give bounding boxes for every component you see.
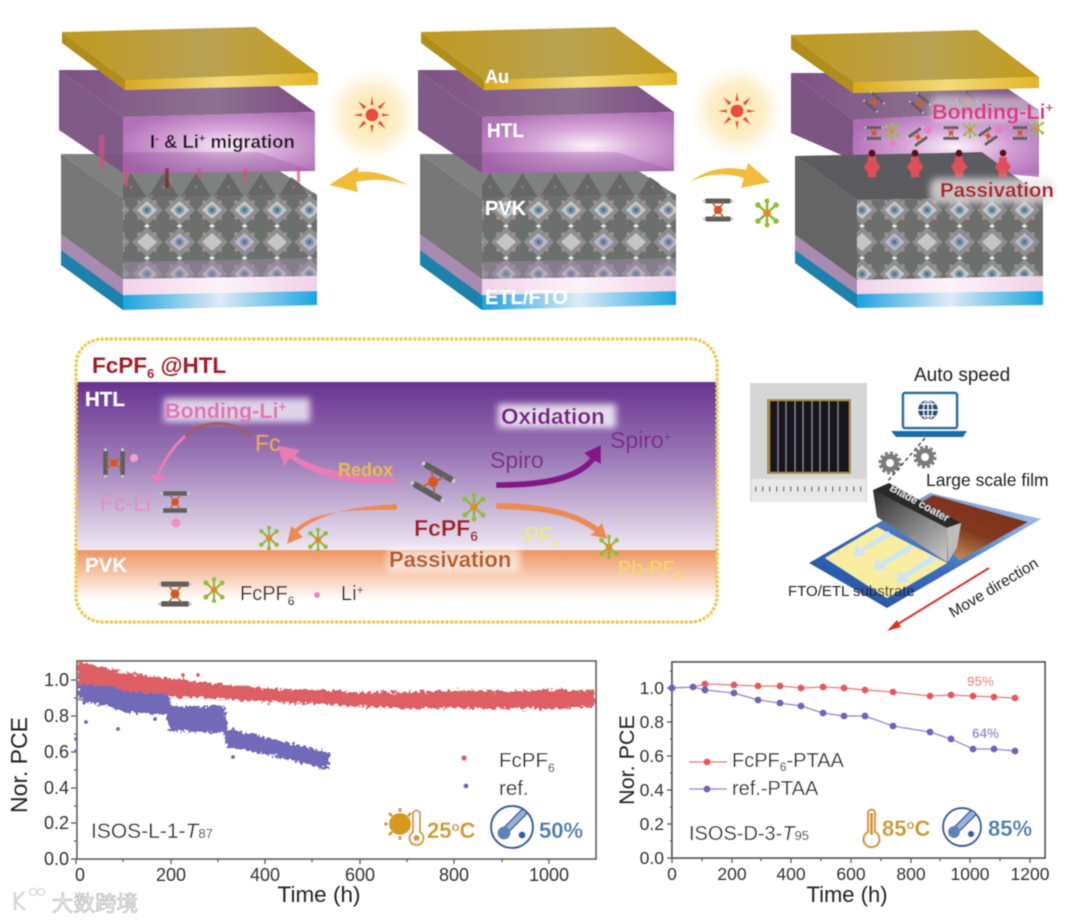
x tick labels: 200 (156, 865, 186, 885)
migration pillars (99, 135, 300, 188)
y tick labels: 0.4 (640, 780, 664, 800)
FcPF6 label: 6 (470, 528, 478, 544)
x tick labels: 1000 (951, 864, 990, 884)
legend: 6 (288, 594, 295, 608)
x tick labels: 0 (75, 865, 85, 885)
legend: ref. (499, 777, 529, 800)
coated film (905, 495, 1028, 560)
legend: FcPF (732, 750, 780, 772)
panel title: 6 (147, 366, 154, 381)
legend: FcPF (499, 749, 548, 772)
outliers (74, 673, 235, 759)
chart: ISOS-D-3 line (615, 662, 1050, 907)
Li dots (890, 126, 1003, 146)
y tick labels: 1.0 (44, 670, 69, 690)
icon: Fc-Li molecule (160, 492, 190, 528)
y tick labels: 0.8 (44, 706, 69, 726)
legend: Li (341, 583, 357, 605)
migration label: I (150, 131, 155, 152)
temperature: C (459, 818, 475, 843)
temperature: 25 (427, 818, 451, 843)
icon: thermometer (864, 810, 880, 847)
Redox label: Redox (338, 460, 393, 480)
passivation pillars (864, 150, 1011, 177)
panel: blade coating schematic (750, 365, 1049, 631)
legend: FcPF (240, 583, 288, 605)
device stack: FcPF6 modified (791, 30, 1054, 308)
x tick labels: 600 (836, 864, 866, 884)
Auto speed label: Auto speed (914, 365, 1010, 386)
panel title: FcPF (92, 353, 147, 378)
migration label: + (199, 133, 205, 145)
arrow: Spiro oxidation (496, 445, 601, 488)
legend: -PTAA (786, 750, 845, 772)
x tick labels: 800 (896, 864, 926, 884)
Move direction label: Move direction (946, 555, 1041, 621)
Passivation label: Passivation (389, 547, 511, 572)
watermark: 大数跨境 (52, 892, 138, 916)
layer labels (485, 67, 568, 309)
arrow: yellow left (329, 167, 408, 192)
x tick labels: 400 (250, 865, 280, 885)
icon: humidity (491, 806, 533, 848)
blade coater (873, 482, 961, 562)
chart: ISOS-L-1 scatter (6, 661, 596, 907)
Fc label: Fc (255, 430, 281, 456)
PF6 label: -PF (517, 523, 552, 548)
series: FcPF6-PTAA (668, 680, 1018, 702)
watermark (15, 888, 138, 916)
icon: gears (880, 447, 935, 473)
x axis title: Time (h) (806, 882, 888, 907)
icons: PF6 ions (259, 526, 619, 559)
x tick labels: 200 (717, 864, 747, 884)
legend (689, 750, 845, 800)
Oxidation label: Oxidation (501, 404, 605, 429)
panel: FcPF6 at HTL mechanism (76, 339, 717, 622)
y tick labels: 0.0 (640, 848, 664, 868)
icon: sun left (320, 63, 424, 167)
arrow: orange left (287, 504, 397, 544)
axis ticks (667, 671, 1030, 863)
migration label: - (155, 133, 159, 145)
Spiro+ label: + (664, 429, 671, 444)
HTL label: HTL (85, 388, 125, 411)
blade coater: Blade coater (888, 482, 952, 525)
value labels: 64% (972, 726, 999, 741)
temperature: 85 (882, 816, 906, 841)
temperature: o (906, 817, 914, 832)
FcPF6 label: FcPF (414, 515, 470, 541)
y tick labels: 0.6 (640, 746, 664, 766)
Fc-Li label: Fc-Li (100, 490, 151, 516)
Bonding-Li label: Bonding-Li (165, 399, 278, 423)
layer labels: HTL (487, 121, 524, 142)
x tick labels (75, 865, 569, 885)
substrate (809, 493, 1041, 608)
y tick labels (44, 670, 69, 869)
layer labels: PVK (485, 198, 527, 220)
y tick labels: 0.6 (44, 742, 69, 762)
temperature: C (914, 816, 930, 841)
migration label: migration (205, 131, 295, 152)
y axis title: Nor. PCE (6, 717, 32, 813)
molecules in HTL (863, 89, 1044, 147)
substrate label: FTO/ETL substrate (788, 583, 915, 600)
x tick labels: 800 (439, 865, 469, 885)
migration label: & Li (159, 131, 199, 152)
x tick labels (667, 864, 1050, 884)
Bonding-Li label: + (1045, 100, 1053, 115)
icon: central FcPF6 molecule (410, 461, 486, 522)
y tick labels: 1.0 (640, 678, 664, 698)
wet region (825, 527, 947, 598)
y tick labels: 0.0 (44, 849, 69, 869)
layer labels: Au (485, 67, 509, 87)
y tick labels: 0.8 (640, 712, 664, 732)
Pb-PF6 label: Pb-PF (618, 558, 675, 580)
panel title: @HTL (154, 353, 226, 378)
icon: humidity (943, 808, 981, 846)
legend: 6 (780, 760, 787, 774)
icon: Fc with Li (104, 448, 138, 478)
x tick labels: 1000 (529, 865, 569, 885)
arrow: yellow right (690, 163, 770, 188)
y tick labels: 0.4 (44, 778, 69, 798)
Pb-PF6 label: 6 (675, 569, 682, 583)
Spiro label: Spiro (490, 447, 544, 473)
icon: laptop (891, 393, 967, 437)
arrow: move direction (887, 568, 989, 631)
Spiro+ label: Spiro (610, 427, 664, 453)
Bonding-Li label: Bonding-Li (932, 100, 1045, 124)
value labels (967, 674, 999, 741)
x tick labels: 0 (667, 864, 677, 884)
device stack: pristine with layer labels (418, 27, 677, 310)
icon: FcPF6 molecule near arrow (702, 198, 779, 228)
y tick labels: 0.2 (640, 814, 664, 834)
icon: sun right (685, 59, 789, 163)
y axis title: Nor. PCE (615, 715, 639, 805)
layer labels: ETL/FTO (485, 287, 568, 309)
arrow: Fc to Fc-Li (151, 423, 251, 483)
legend (461, 749, 555, 800)
series: ref (78, 684, 329, 770)
x axis title: Time (h) (278, 882, 360, 907)
protocol label: ISOS-D-3-T95 (689, 823, 809, 845)
device stack: aged with I and Li migration (59, 27, 318, 310)
Passivation label: Passivation (940, 179, 1054, 202)
arrow: orange right (496, 503, 607, 539)
protocol label: ISOS-L-1-T87 (91, 820, 213, 843)
axis ticks (71, 680, 549, 864)
legend: 6 (548, 761, 555, 775)
dashed link (887, 438, 925, 482)
Bonding-Li label: + (278, 399, 286, 414)
y tick labels (640, 678, 664, 868)
Large scale film label: Large scale film (926, 470, 1049, 490)
x tick labels: 1200 (1011, 864, 1050, 884)
flow arrows (853, 531, 937, 583)
icon: sun and thermometer (384, 808, 424, 845)
y tick labels: 0.2 (44, 813, 69, 833)
x tick labels: 400 (776, 864, 806, 884)
legend (158, 577, 364, 608)
temperature: o (451, 819, 459, 834)
humidity value: 50% (539, 818, 583, 843)
PVK label: PVK (85, 554, 127, 577)
arrow: Redox (278, 446, 395, 483)
series: FcPF6 (78, 662, 594, 709)
value labels: 95% (967, 674, 994, 689)
legend: + (357, 583, 364, 597)
series: ref-PTAA (668, 684, 1018, 754)
humidity value: 85% (988, 816, 1032, 841)
PF6 label: 6 (552, 536, 560, 551)
photo of module (750, 383, 867, 502)
legend: ref.-PTAA (732, 778, 819, 800)
x tick labels: 600 (345, 865, 375, 885)
